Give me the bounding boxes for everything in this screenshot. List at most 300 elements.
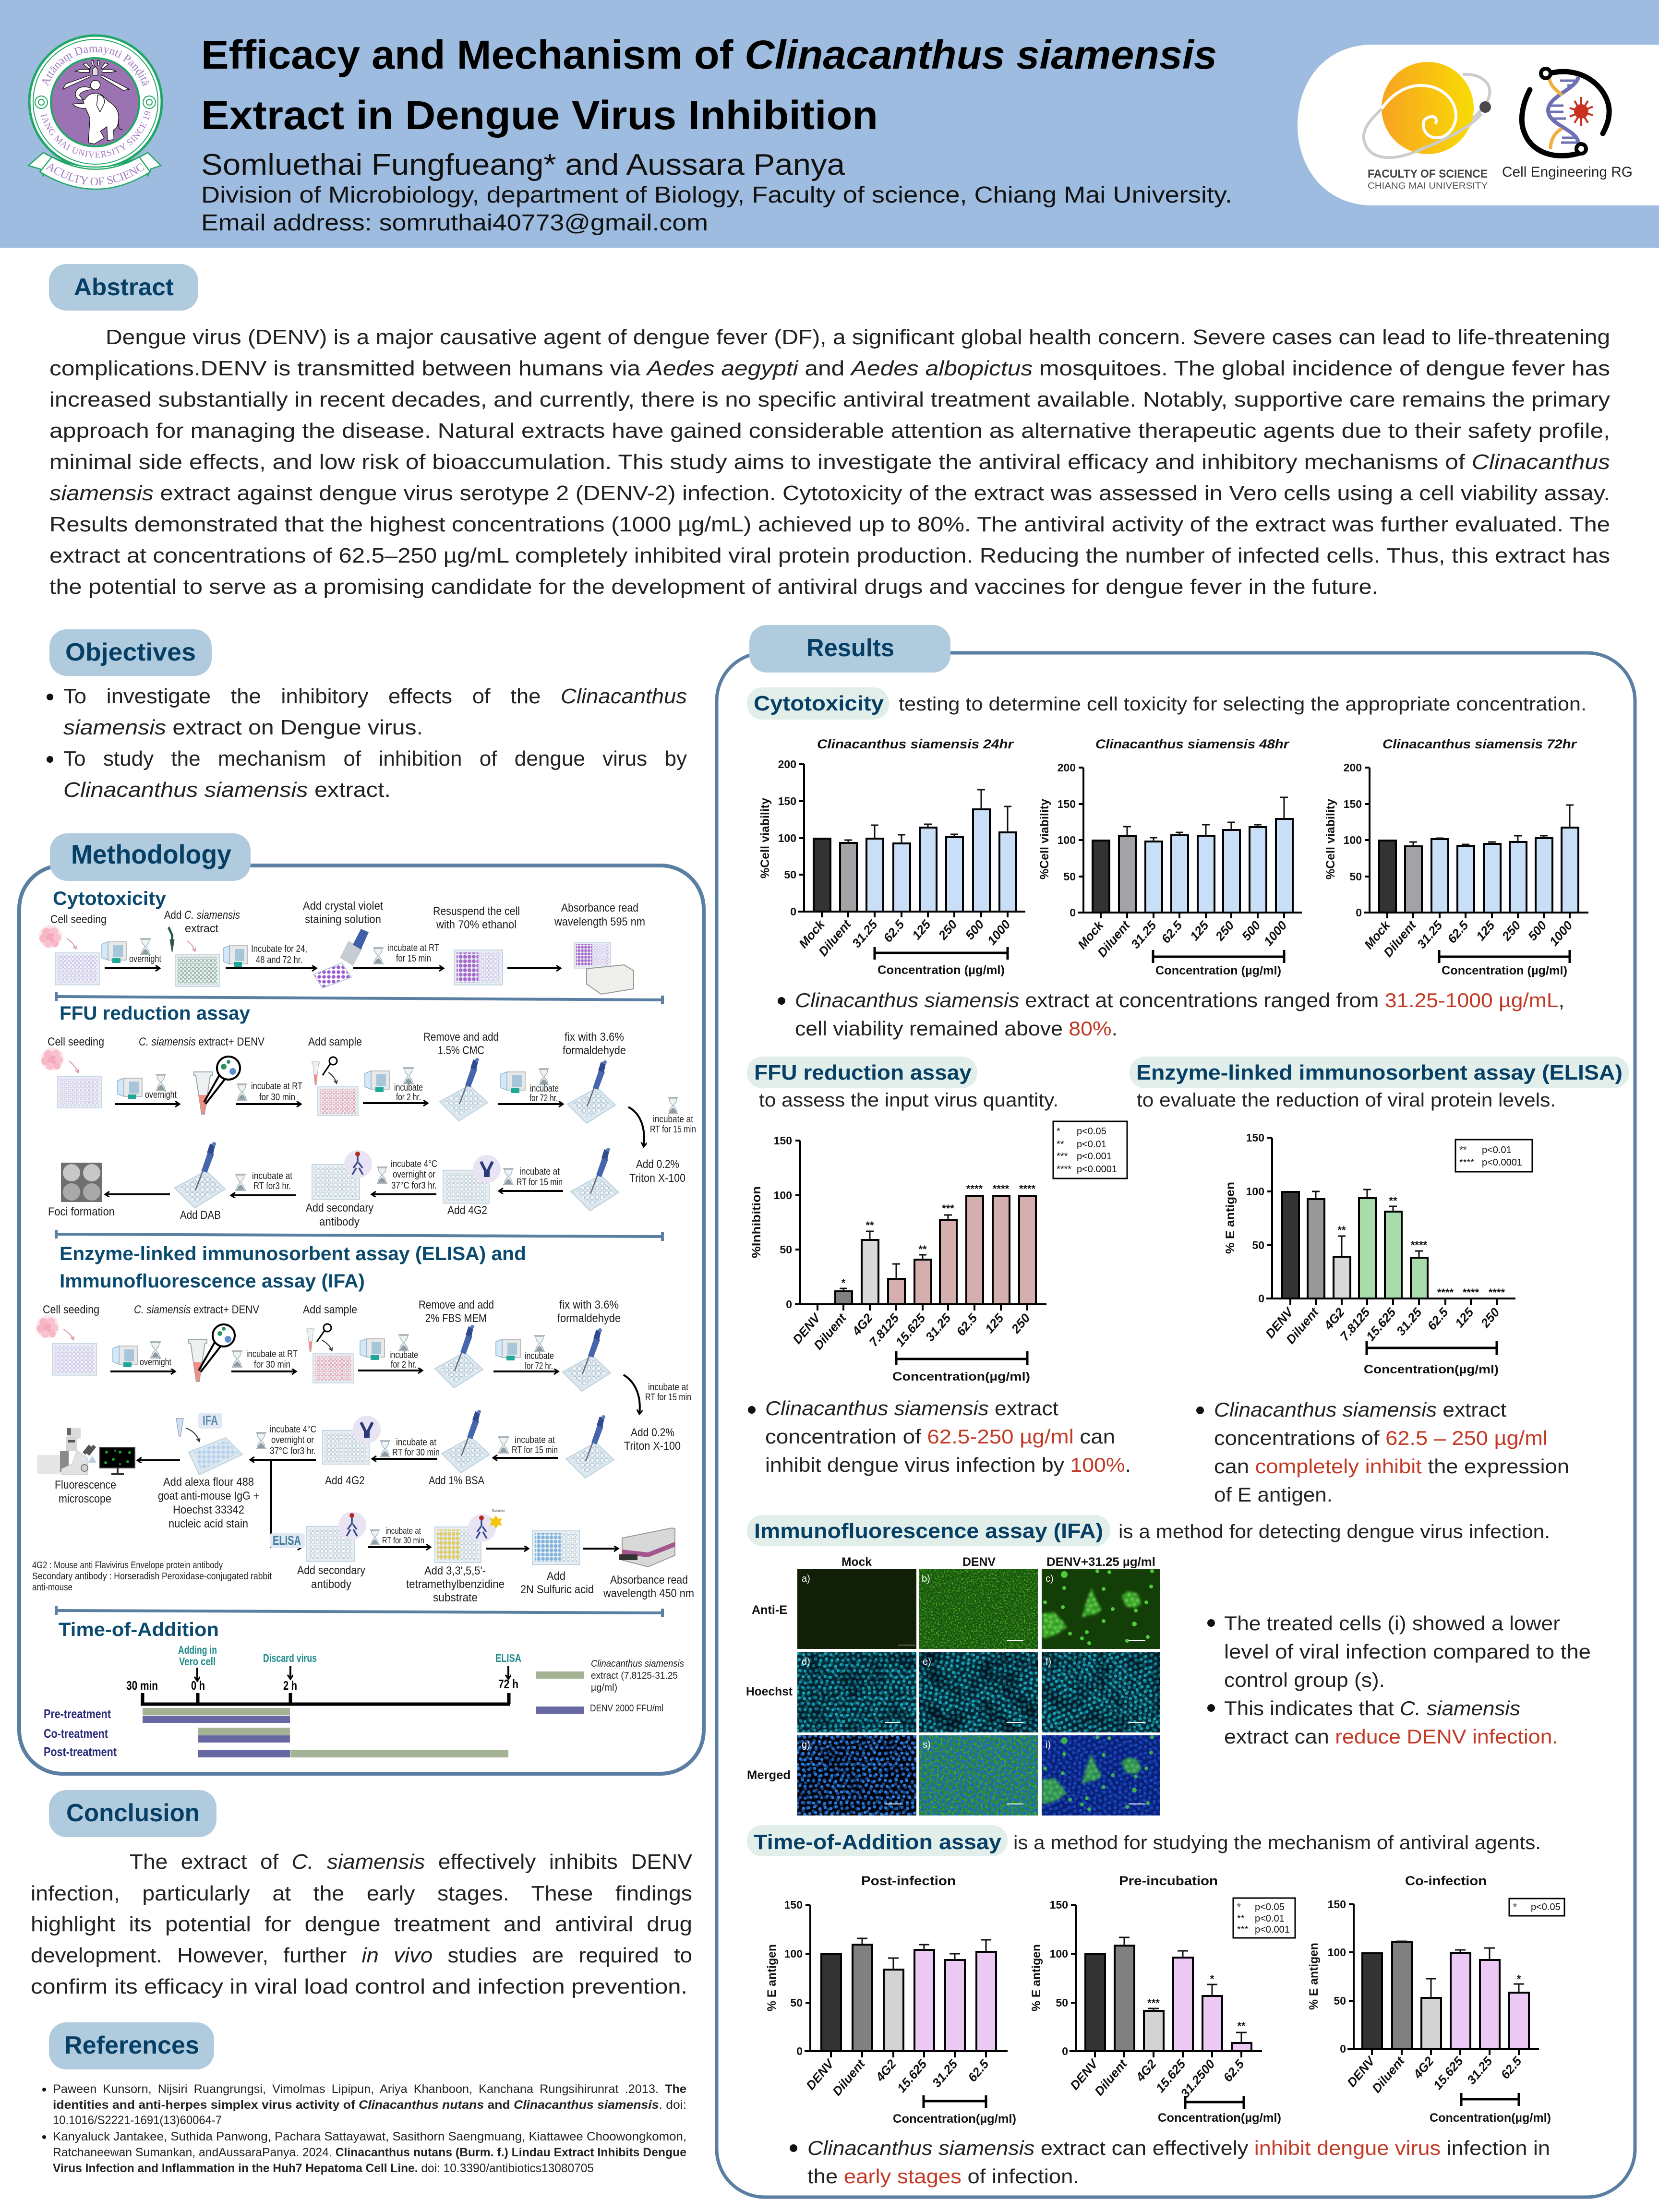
chart: ELISA E antigen: 7.8125 xyxy=(1337,1305,1373,1344)
cytotoxicity workflow: incubate at RT xyxy=(387,943,439,953)
chart: cell viability 72hr: 150 xyxy=(1344,798,1362,810)
FFU reduction workflow: incubate at RT xyxy=(251,1081,302,1092)
ELISA and IFA workflow: for 72 hr. xyxy=(525,1361,553,1371)
chart: cell viability 24hr: 100 xyxy=(778,832,796,844)
chart: co-infection: Concentration(µg/ml) xyxy=(1430,2111,1551,2125)
icon: monitor xyxy=(100,1447,135,1474)
chart: ELISA E antigen: 15.625 xyxy=(1363,1305,1399,1344)
ELISA and IFA workflow: 37°C for3 hr. xyxy=(270,1446,316,1456)
significance legend xyxy=(1233,1898,1295,1938)
icon: fluorescence microscope xyxy=(37,1428,96,1475)
FFU reduction workflow: RT for 15 min xyxy=(517,1177,563,1188)
chart: ELISA E antigen: **** xyxy=(1463,1286,1479,1298)
chart: ELISA E antigen: **** xyxy=(1411,1239,1428,1251)
time-of-addition diagram: µg/ml) xyxy=(591,1683,617,1693)
chart: cell viability 72hr: Mock xyxy=(1361,917,1394,952)
cytotoxicity workflow: extract xyxy=(185,922,218,935)
section: conclusion xyxy=(31,1790,693,1998)
significance legend: p<0.05 xyxy=(1531,1902,1561,1912)
significance legend: p<0.01 xyxy=(1482,1145,1512,1155)
references list xyxy=(42,2082,686,2175)
antibody notes: anti-mouse xyxy=(32,1582,72,1593)
chart: co-infection: 150 xyxy=(1328,1898,1346,1911)
abstract text: Dengue virus (DENV) is a major causative agent of dengue fever (DF), a significant global health concern. Severe cases can lead to life-threatening xyxy=(106,325,1610,349)
affiliation: Division of Microbiology, department of Biology, Faculty of science, Chiang Mai University. xyxy=(201,182,1232,208)
cytotoxicity workflow: Incubate for 24, xyxy=(251,944,307,954)
FFU reduction workflow: 1.5% CMC xyxy=(438,1044,484,1057)
chart: cell viability 24hr: 0 xyxy=(790,905,796,918)
chart: FFU inhibition: 4G2 xyxy=(849,1310,876,1338)
chart: post-infection: 150 xyxy=(784,1899,803,1911)
ELISA and IFA workflow: Fluorescence xyxy=(55,1479,116,1491)
significance legend: p<0.01 xyxy=(1255,1913,1285,1924)
objectives list xyxy=(47,685,687,802)
chart: post-infection: Concentration(µg/ml) xyxy=(893,2112,1016,2126)
email: Email address: somruthai40773@gmail.com xyxy=(201,210,708,236)
micrograph grid: DENV xyxy=(962,1555,996,1569)
chart: cell viability 24hr: Concentration (µg/ml) xyxy=(878,963,1005,977)
significance legend xyxy=(1509,1899,1564,1916)
chart: co-infection: * xyxy=(1517,1973,1521,1985)
IFA heading xyxy=(747,1515,1110,1546)
chart: cell viability 72hr: 125 xyxy=(1473,918,1498,943)
ELISA and IFA workflow: RT for 15 min xyxy=(512,1445,558,1455)
chart: cell viability 72hr: 0 xyxy=(1356,906,1362,919)
time-of-addition diagram: Time-of-Addition xyxy=(59,1619,219,1640)
chart: FFU inhibition: **** xyxy=(993,1183,1010,1195)
significance legend: **** xyxy=(1459,1157,1474,1168)
conclusion heading xyxy=(49,1790,216,1837)
chart: cell viability 72hr: 250 xyxy=(1499,918,1524,944)
FFU reduction workflow: incubate 4°C xyxy=(391,1159,437,1169)
FFU reduction workflow: incubate at xyxy=(252,1171,292,1181)
micrograph grid: s) xyxy=(923,1740,931,1750)
FFU reduction workflow: 37°C for3 hr. xyxy=(391,1180,437,1191)
chart: co-infection xyxy=(1307,1874,1564,2125)
ELISA and IFA workflow: for 2 hr. xyxy=(391,1359,417,1370)
ELISA and IFA workflow: nucleic acid stain xyxy=(168,1517,248,1530)
chart: pre-incubation: 0 xyxy=(1062,2045,1068,2057)
ELISA and IFA workflow: wavelength 450 nm xyxy=(603,1587,694,1600)
ELISA finding: concentrations of 62.5 – 250 µg/ml xyxy=(1214,1427,1548,1449)
objectives list: To study the mechanism of inhibition of dengue virus by xyxy=(63,747,687,770)
chart: pre-incubation: 15.625 xyxy=(1153,2056,1189,2095)
chart: co-infection: 100 xyxy=(1328,1946,1346,1959)
ELISA and IFA workflow: antibody xyxy=(311,1578,351,1591)
header banner xyxy=(0,0,1659,248)
FFU reduction workflow: Add 4G2 xyxy=(447,1204,487,1217)
chart: FFU inhibition: 250 xyxy=(1008,1310,1033,1336)
FFU heading xyxy=(747,1057,977,1088)
chart: ELISA E antigen: ** xyxy=(1389,1195,1397,1207)
time-of-addition diagram: Post-treatment xyxy=(44,1744,117,1759)
chart: cell viability 24hr xyxy=(758,737,1025,977)
abstract text: siamensis extract against dengue virus serotype 2 (DENV-2) infection. Cytotoxicity of the extract was assessed in Vero cells using a cell viability assay. xyxy=(49,481,1610,505)
results heading: Results xyxy=(806,634,894,662)
time-of-addition heading xyxy=(747,1825,1008,1856)
panel: results xyxy=(717,625,1635,2197)
chart: pre-incubation: DENV xyxy=(1067,2056,1101,2092)
ELISA and IFA workflow: overnight xyxy=(140,1357,171,1368)
section: abstract xyxy=(49,264,1610,599)
logo: Faculty of Science: FACULTY OF SCIENCE xyxy=(1368,168,1488,180)
time-of-addition diagram: Co-treatment xyxy=(44,1726,108,1741)
cytotoxicity finding xyxy=(778,989,1564,1040)
chart: pre-incubation: Pre-incubation xyxy=(1119,1874,1218,1888)
references list: Paween Kunsorn, Nijsiri Ruangrungsi, Vimolmas Lipipun, Ariya Khanboon, Kanchana Rungsihirunrat .2013. The xyxy=(53,2082,686,2096)
chart: cell viability 48hr: 250 xyxy=(1212,918,1237,944)
micrograph grid: i) xyxy=(1046,1740,1051,1750)
ELISA and IFA workflow: C. siamensis extract+ DENV xyxy=(134,1303,259,1316)
cytotoxicity workflow: wavelength 595 nm xyxy=(554,915,645,928)
ELISA heading xyxy=(1130,1057,1629,1088)
abstract text: the potential to serve as a promising candidate for the development of antiviral drugs and vaccines for dengue fever in the future. xyxy=(49,575,1378,599)
chart: ELISA E antigen: 31.25 xyxy=(1394,1305,1425,1338)
ELISA and IFA workflow: RT for 30 min xyxy=(382,1536,424,1545)
FFU reduction workflow: Foci formation xyxy=(48,1205,115,1218)
time-of-addition finding: Clinacanthus siamensis extract can effectively inhibit dengue virus infection in xyxy=(807,2137,1550,2159)
FFU reduction workflow: C. siamensis extract+ DENV xyxy=(139,1035,264,1048)
ELISA and IFA workflow: formaldehyde xyxy=(557,1312,621,1325)
cytotoxicity workflow: Add C. siamensis xyxy=(164,909,240,922)
time-of-addition finding: the early stages of infection. xyxy=(807,2165,1079,2188)
methodology heading xyxy=(50,833,251,881)
cytotoxicity workflow xyxy=(39,888,645,994)
cytotoxicity workflow: Cytotoxicity xyxy=(53,888,167,909)
antibody notes: 4G2 : Mouse anti Flavivirus Envelope protein antibody xyxy=(32,1560,223,1571)
ELISA and IFA workflow: incubate at xyxy=(515,1435,555,1445)
ELISA and IFA workflow: RT for 30 min xyxy=(392,1447,440,1458)
chart: cell viability 72hr: 1000 xyxy=(1546,918,1575,949)
chart: FFU inhibition: ** xyxy=(918,1243,927,1255)
cytotoxicity workflow: overnight xyxy=(129,954,161,964)
micrograph grid: DENV+31.25 µg/ml xyxy=(1046,1555,1155,1569)
chart: cell viability 24hr: 200 xyxy=(778,758,796,770)
chart: cell viability 48hr: 500 xyxy=(1239,918,1263,943)
cytotoxicity workflow: with 70% ethanol xyxy=(436,918,517,931)
chart: FFU inhibition: 50 xyxy=(780,1243,792,1256)
IFA finding: control group (s). xyxy=(1224,1669,1385,1691)
ELISA and IFA workflow: goat anti-mouse IgG + xyxy=(158,1490,259,1503)
time-of-addition diagram: 72 h xyxy=(498,1677,518,1691)
ELISA and IFA workflow: Substrate xyxy=(492,1509,505,1513)
significance legend: ** xyxy=(1459,1145,1467,1155)
objectives heading: Objectives xyxy=(65,638,196,666)
ELISA and IFA workflow: incubate at RT xyxy=(246,1349,298,1359)
chart: cell viability 24hr: Clinacanthus siamensis 24hr xyxy=(817,737,1014,751)
IFA finding: extract can reduce DENV infection. xyxy=(1224,1725,1558,1748)
chart: ELISA E antigen: DENV xyxy=(1262,1304,1297,1341)
chart: ELISA E antigen: 150 xyxy=(1246,1131,1264,1144)
time-of-addition diagram: Vero cell xyxy=(179,1655,216,1668)
significance legend: p<0.0001 xyxy=(1482,1157,1522,1168)
FFU reduction workflow: for 72 hr. xyxy=(529,1093,558,1104)
chart: pre-incubation: 100 xyxy=(1050,1948,1068,1960)
chart: cell viability 24hr: %Cell viability xyxy=(758,798,772,878)
chart: co-infection: 15.625 xyxy=(1430,2054,1466,2092)
IFA finding: The treated cells (i) showed a lower xyxy=(1224,1612,1560,1635)
cytotoxicity workflow: staining solution xyxy=(305,913,381,926)
chart: ELISA E antigen: **** xyxy=(1489,1286,1505,1298)
cytotoxicity finding: cell viability remained above 80%. xyxy=(795,1017,1118,1040)
ELISA and IFA workflow: Enzyme-linked immunosorbent assay (ELISA) and xyxy=(60,1243,526,1264)
abstract text: extract at concentrations of 62.5–250 µg/mL completely inhibited viral protein production. Reducing the number of infected cells. Thus, this extract has xyxy=(49,544,1610,567)
logo: Faculty of Science: CHIANG MAI UNIVERSITY xyxy=(1368,181,1488,191)
ELISA and IFA workflow: Triton X-100 xyxy=(624,1440,681,1453)
chart: cell viability 48hr: 31.25 xyxy=(1128,918,1159,951)
ELISA and IFA workflow: substrate xyxy=(433,1591,478,1604)
chart: post-infection: 50 xyxy=(790,1996,803,2009)
chart: cell viability 24hr: 250 xyxy=(935,917,960,943)
chart: FFU inhibition: * xyxy=(842,1277,846,1289)
ELISA and IFA workflow: for 30 min xyxy=(254,1359,290,1370)
ELISA and IFA workflow: Remove and add xyxy=(419,1298,494,1311)
micrograph grid: c) xyxy=(1046,1574,1054,1584)
FFU reduction workflow: for 2 hr. xyxy=(396,1092,421,1103)
chart: pre-incubation: 50 xyxy=(1056,1996,1068,2009)
time-of-addition diagram xyxy=(44,1619,684,1759)
micrograph grid: Merged xyxy=(747,1768,791,1782)
logo: Faculty of Science xyxy=(1364,62,1491,191)
FFU reduction workflow: overnight or xyxy=(393,1169,435,1180)
ELISA finding: can completely inhibit the expression xyxy=(1214,1455,1569,1478)
chart: cell viability 24hr: 50 xyxy=(784,868,796,881)
chart: co-infection: Co-infection xyxy=(1405,1874,1487,1888)
FFU reduction workflow: antibody xyxy=(319,1215,360,1228)
cytotoxicity heading: Cytotoxicity xyxy=(754,692,884,715)
FFU finding: inhibit dengue virus infection by 100%. xyxy=(765,1454,1131,1476)
significance legend xyxy=(1455,1140,1532,1172)
chart: ELISA E antigen: 125 xyxy=(1452,1305,1477,1330)
FFU reduction workflow: Triton X-100 xyxy=(629,1172,685,1185)
ELISA and IFA workflow: ELISA xyxy=(273,1533,301,1548)
chart: post-infection: 4G2 xyxy=(872,2056,899,2084)
chart: co-infection: 50 xyxy=(1334,1995,1346,2007)
ELISA and IFA workflow xyxy=(32,1243,694,1604)
cytotoxicity heading xyxy=(747,687,889,720)
chart: FFU inhibition: **** xyxy=(966,1183,983,1195)
FFU finding: Clinacanthus siamensis extract xyxy=(765,1397,1058,1419)
conclusion text: confirm its efficacy in viral load control and infection prevention. xyxy=(31,1975,687,1998)
chart: cell viability 48hr: 200 xyxy=(1058,761,1076,774)
chart: FFU inhibition: DENV xyxy=(790,1310,824,1346)
chart: pre-incubation: % E antigen xyxy=(1030,1944,1043,2011)
cytotoxicity workflow: for 15 min xyxy=(396,953,431,964)
chart: pre-incubation: 150 xyxy=(1050,1899,1068,1911)
chart: ELISA E antigen: 50 xyxy=(1252,1239,1264,1251)
IFA description: is a method for detecting dengue virus infection. xyxy=(1118,1521,1550,1542)
chart: cell viability 24hr: 125 xyxy=(909,917,934,942)
ELISA finding: of E antigen. xyxy=(1214,1483,1333,1506)
chart: cell viability 48hr: 150 xyxy=(1058,798,1076,810)
cytotoxicity workflow: Add crystal violet xyxy=(303,900,383,913)
chart: FFU inhibition: 100 xyxy=(774,1189,792,1202)
FFU finding xyxy=(748,1397,1131,1476)
chart: ELISA E antigen: 0 xyxy=(1258,1292,1264,1305)
significance legend: * xyxy=(1513,1902,1517,1912)
section: references xyxy=(42,2022,686,2175)
chart: FFU inhibition: 7.8125 xyxy=(866,1310,902,1349)
ELISA description: to evaluate the reduction of viral protein levels. xyxy=(1137,1090,1556,1111)
antibody notes xyxy=(32,1560,272,1593)
time-of-addition heading: Time-of-Addition assay xyxy=(754,1830,1002,1854)
FFU reduction workflow: RT for3 hr. xyxy=(253,1181,291,1191)
chart: post-infection: 100 xyxy=(784,1948,803,1960)
FFU reduction workflow: incubate at xyxy=(519,1166,560,1177)
ELISA and IFA workflow: Add 0.2% xyxy=(631,1426,674,1439)
ELISA and IFA workflow: RT for 15 min xyxy=(645,1392,691,1403)
objectives list: To investigate the inhibitory effects of the Clinacanthus xyxy=(63,685,687,708)
chart: FFU inhibition xyxy=(750,1121,1127,1383)
references list: identities and anti-herpes simplex virus activity of Clinacanthus nutans and Clinacanthus siamensis . doi: xyxy=(53,2098,686,2112)
chart: cell viability 72hr: 100 xyxy=(1344,834,1362,846)
significance legend: p<0.05 xyxy=(1255,1902,1285,1912)
FFU reduction workflow: Add secondary xyxy=(306,1202,373,1214)
ELISA and IFA workflow: tetramethylbenzidine xyxy=(406,1578,505,1591)
micrograph grid: a) xyxy=(802,1574,810,1584)
ELISA and IFA workflow: 2% FBS MEM xyxy=(425,1312,487,1325)
ELISA and IFA workflow: incubate xyxy=(525,1351,554,1361)
chart: cell viability 24hr: 31.25 xyxy=(849,917,880,950)
time-of-addition description: is a method for studying the mechanism of antiviral agents. xyxy=(1013,1832,1541,1853)
chart: cell viability 48hr xyxy=(1038,737,1302,977)
time-of-addition finding xyxy=(790,2137,1550,2188)
cytotoxicity finding: Clinacanthus siamensis extract at concentrations ranged from 31.25-1000 µg/mL , xyxy=(795,989,1564,1011)
FFU heading: FFU reduction assay xyxy=(754,1061,972,1084)
conclusion text xyxy=(31,1850,693,1998)
chart: pre-incubation: 31.2500 xyxy=(1178,2056,1218,2101)
chart: ELISA E antigen: 250 xyxy=(1478,1305,1503,1331)
time-of-addition diagram: 2 h xyxy=(283,1678,297,1693)
FFU reduction workflow: Add 0.2% xyxy=(636,1158,679,1171)
cytotoxicity description: testing to determine cell toxicity for selecting the appropriate concentration. xyxy=(899,694,1587,715)
chart: cell viability 48hr: %Cell viability xyxy=(1038,799,1051,879)
ELISA and IFA workflow: incubate at xyxy=(385,1526,421,1536)
chart: cell viability 72hr: Concentration (µg/ml) xyxy=(1442,964,1567,977)
FFU reduction workflow: overnight xyxy=(145,1090,177,1100)
conclusion text: highlight its potential for dengue treatment and antiviral drug xyxy=(31,1912,692,1936)
conclusion heading: Conclusion xyxy=(66,1799,200,1827)
chart: co-infection: 62.5 xyxy=(1498,2054,1525,2082)
significance legend: *** xyxy=(1057,1151,1068,1162)
significance legend: *** xyxy=(1237,1924,1249,1935)
ELISA and IFA workflow: Add alexa flour 488 xyxy=(163,1476,254,1489)
logo panel xyxy=(1298,45,1659,205)
chart: pre-incubation: *** xyxy=(1147,1997,1160,2009)
chart: cell viability 48hr: 50 xyxy=(1063,870,1076,883)
time-of-addition diagram: 0 h xyxy=(191,1678,205,1693)
chart: pre-incubation xyxy=(1030,1874,1295,2125)
cytotoxicity workflow: Cell seeding xyxy=(50,913,107,926)
ELISA and IFA workflow: Cell seeding xyxy=(43,1303,99,1316)
significance legend: p<0.001 xyxy=(1077,1151,1112,1162)
methodology heading: Methodology xyxy=(71,839,231,869)
significance legend: * xyxy=(1057,1126,1060,1137)
objectives list: Clinacanthus siamensis extract. xyxy=(63,778,391,802)
FFU reduction workflow: incubate xyxy=(394,1082,423,1093)
chart: cell viability 48hr: Diluent xyxy=(1094,918,1133,960)
ELISA and IFA workflow: incubate xyxy=(389,1350,418,1360)
time-of-addition diagram: DENV 2000 FFU/ml xyxy=(590,1703,663,1714)
FFU reduction workflow: FFU reduction assay xyxy=(60,1003,251,1024)
cytotoxicity workflow: Resuspend the cell xyxy=(433,905,520,918)
title line 2: Extract in Dengue Virus Inhibition xyxy=(201,93,878,138)
chart: post-infection: DENV xyxy=(803,2056,837,2092)
abstract text xyxy=(49,325,1610,599)
chart: FFU inhibition: 15.625 xyxy=(892,1310,928,1349)
significance legend: p<0.001 xyxy=(1255,1924,1290,1935)
ELISA and IFA workflow: Add 3,3',5,5'- xyxy=(424,1564,486,1577)
chart: ELISA E antigen: Concentration(µg/ml) xyxy=(1364,1363,1499,1376)
abstract text: approach for managing the disease. Natural extracts have gained considerable attention as alternative therapeutic agents due to their safety profile, xyxy=(49,419,1610,443)
chart: pre-incubation: 62.5 xyxy=(1220,2056,1247,2085)
IFA finding: level of viral infection compared to the xyxy=(1224,1640,1591,1663)
chart: cell viability 48hr: Concentration (µg/ml) xyxy=(1155,964,1281,977)
chart: post-infection: 62.5 xyxy=(965,2056,992,2085)
significance legend: ** xyxy=(1057,1139,1064,1150)
chart: cell viability 24hr: Diluent xyxy=(816,917,854,959)
results heading xyxy=(749,625,950,673)
FFU reduction workflow: for 30 min xyxy=(259,1092,295,1103)
significance legend: * xyxy=(1237,1902,1241,1912)
chart: cell viability 48hr: 100 xyxy=(1058,834,1076,846)
FFU description: to assess the input virus quantity. xyxy=(759,1090,1058,1111)
chart: cell viability 48hr: 125 xyxy=(1187,918,1212,943)
ELISA and IFA workflow: Hoechst 33342 xyxy=(173,1503,244,1516)
cytotoxicity workflow: 48 and 72 hr. xyxy=(256,955,302,965)
references list: Virus Infection and Inflammation in the Huh7 Hepatoma Cell Line. doi: 10.3390/antibiotics13080705 xyxy=(53,2162,594,2175)
micrograph grid: Hoechst xyxy=(746,1685,793,1698)
chart: co-infection: % E antigen xyxy=(1307,1943,1321,2010)
chart: cell viability 72hr: 200 xyxy=(1344,761,1362,774)
IFA finding xyxy=(1207,1612,1591,1748)
ELISA and IFA workflow: Add sample xyxy=(303,1303,357,1316)
FFU finding: concentration of 62.5-250 µg/ml can xyxy=(765,1425,1115,1448)
chart: cell viability 72hr: 31.25 xyxy=(1414,918,1445,951)
chart: FFU inhibition: %Inhibition xyxy=(750,1186,763,1258)
section: objectives xyxy=(47,629,687,802)
chart: pre-incubation: ** xyxy=(1237,2020,1246,2032)
chart: FFU inhibition: ** xyxy=(866,1219,874,1231)
chart: cell viability 72hr: 500 xyxy=(1525,918,1550,943)
objectives list: siamensis extract on Dengue virus. xyxy=(63,716,423,739)
ELISA finding xyxy=(1196,1398,1569,1506)
chart: pre-incubation: Diluent xyxy=(1092,2056,1130,2098)
significance legend xyxy=(1053,1121,1127,1178)
chart: ELISA E antigen: 100 xyxy=(1246,1185,1264,1198)
chart: ELISA E antigen: 4G2 xyxy=(1321,1305,1347,1333)
authors: Somluethai Fungfueang* and Aussara Panya xyxy=(201,148,845,181)
chart: ELISA E antigen: 62.5 xyxy=(1424,1305,1451,1333)
micrograph grid xyxy=(746,1555,1160,1815)
chart: co-infection: 31.25 xyxy=(1464,2054,1495,2087)
conclusion text: The extract of C. siamensis effectively inhibits DENV xyxy=(130,1850,693,1874)
ELISA and IFA workflow: IFA xyxy=(203,1413,218,1428)
significance legend: **** xyxy=(1057,1164,1071,1175)
chart: cell viability 24hr: 1000 xyxy=(984,917,1013,948)
FFU reduction workflow: incubate at xyxy=(653,1114,693,1125)
chart: cell viability 72hr: Clinacanthus siamensis 72hr xyxy=(1382,737,1577,751)
ELISA and IFA workflow: fix with 3.6% xyxy=(559,1298,619,1311)
FFU reduction workflow: Add sample xyxy=(308,1035,362,1048)
chart: cell viability 72hr: 62.5 xyxy=(1444,918,1471,946)
chart: FFU inhibition: Diluent xyxy=(811,1310,849,1352)
significance legend: p<0.01 xyxy=(1077,1139,1106,1150)
chart: pre-incubation: * xyxy=(1210,1973,1214,1985)
IFA heading: Immunofluorescence assay (IFA) xyxy=(754,1519,1103,1543)
abstract heading: Abstract xyxy=(74,274,174,301)
abstract heading xyxy=(49,264,198,311)
